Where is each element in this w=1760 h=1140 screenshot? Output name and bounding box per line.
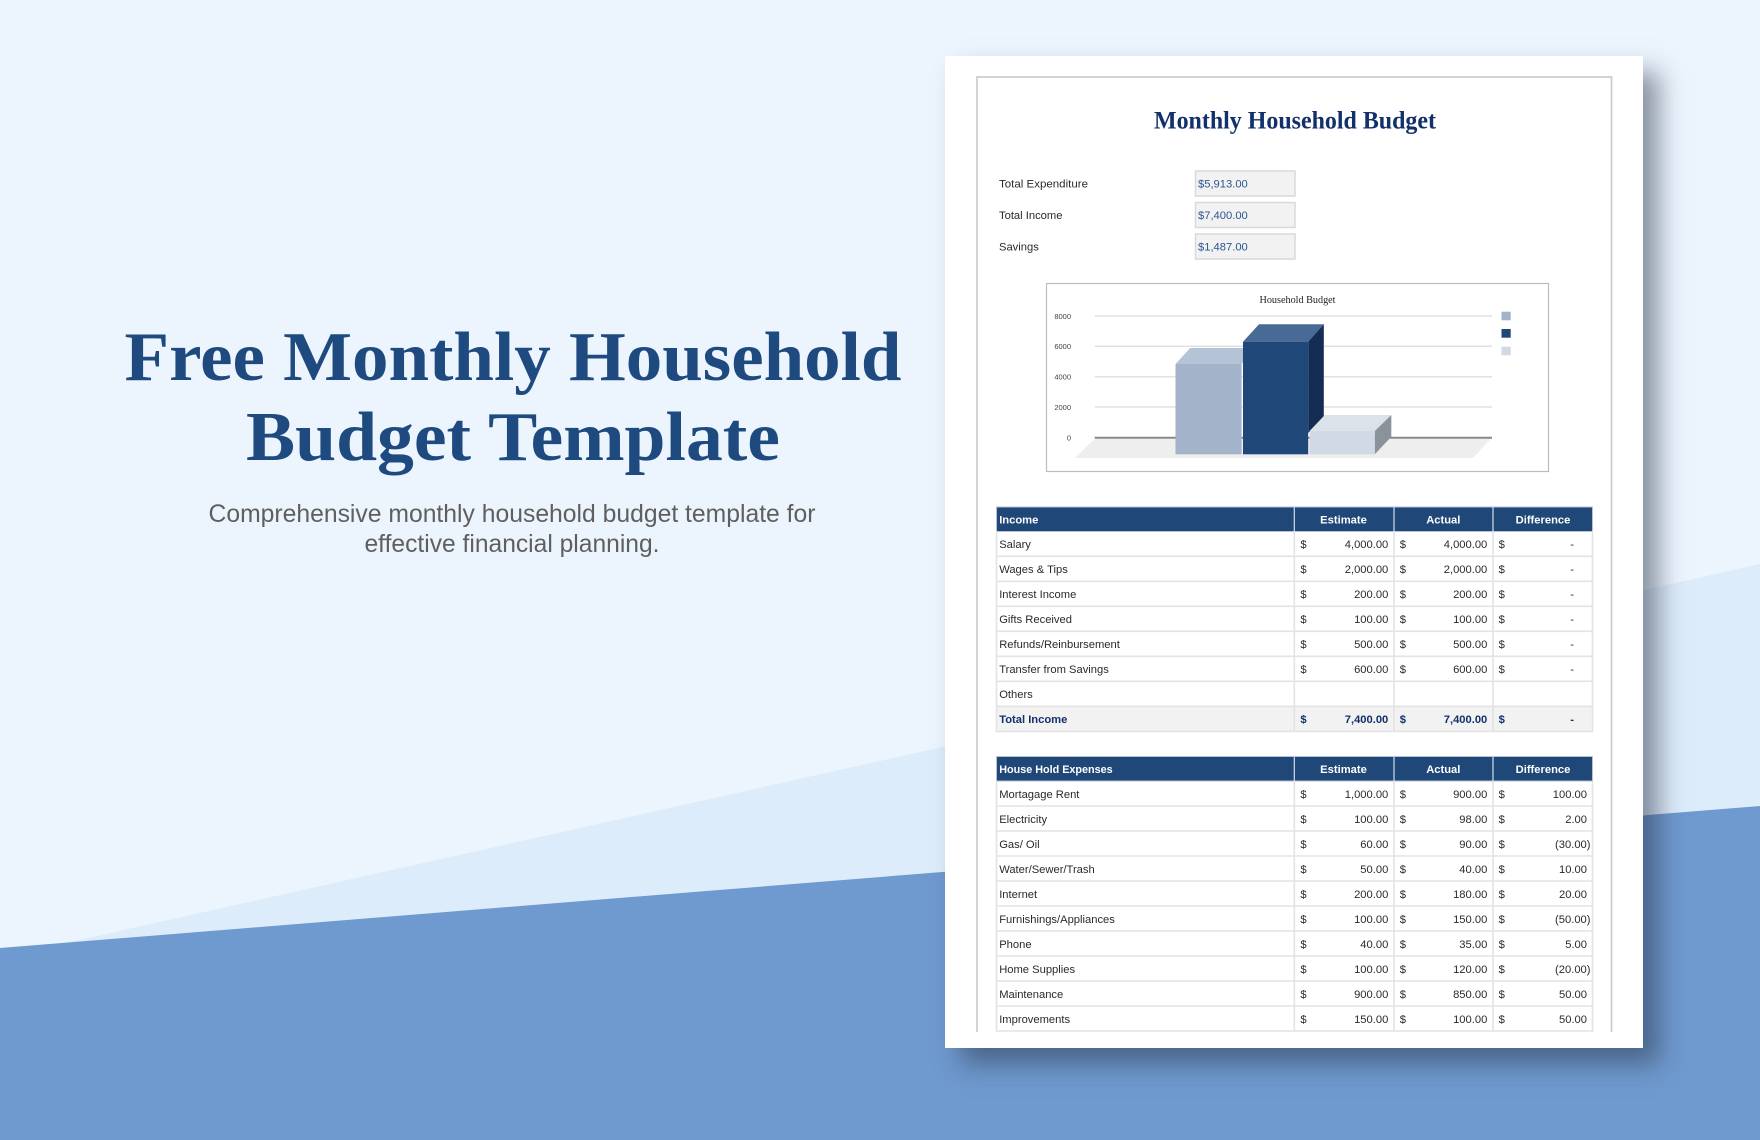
row: maintenance: $ [1499, 989, 1506, 1001]
row: maintenance [999, 989, 1587, 1001]
row: refunds [999, 639, 1574, 651]
row: wages and tips: - [1570, 564, 1574, 576]
row: transfer from savings: $ [1300, 664, 1307, 676]
row: improvements: Improvements [999, 1014, 1070, 1026]
row: mortgage rent: $ [1300, 789, 1307, 801]
row: furnishings: Furnishings/Appliances [999, 914, 1115, 926]
row: gifts received [999, 614, 1574, 626]
row: gifts received: $ [1400, 614, 1407, 626]
row: transfer from savings: 600.00 [1453, 664, 1487, 676]
row: electricity [999, 814, 1587, 826]
row: interest income: Interest Income [999, 589, 1076, 601]
summary: savings: Savings [999, 242, 1039, 254]
row: transfer from savings: $ [1499, 664, 1506, 676]
row: home supplies: $ [1499, 964, 1506, 976]
row: interest income: $ [1400, 589, 1407, 601]
row: furnishings: $ [1499, 914, 1506, 926]
expenses table header: Difference [1516, 764, 1570, 776]
row: others: Others [999, 689, 1033, 701]
row: improvements: 50.00 [1559, 1014, 1587, 1026]
row: mortgage rent: 1,000.00 [1345, 789, 1388, 801]
title: Budget Template [246, 399, 780, 476]
row: phone: $ [1300, 939, 1307, 951]
row: refunds: 500.00 [1354, 639, 1388, 651]
row: wages and tips [999, 564, 1574, 576]
row: internet: $ [1300, 889, 1307, 901]
row: improvements: $ [1499, 1014, 1506, 1026]
row: phone [999, 939, 1587, 951]
row: electricity: 98.00 [1459, 814, 1487, 826]
row: electricity: $ [1300, 814, 1307, 826]
summary: savings [999, 234, 1295, 259]
summary: savings: $1,487.00 [1198, 242, 1248, 254]
row: gifts received: Gifts Received [999, 614, 1072, 626]
row: wages and tips: 2,000.00 [1444, 564, 1487, 576]
summary: total income [999, 202, 1295, 228]
row: refunds: $ [1400, 639, 1407, 651]
row: salary: $ [1300, 539, 1307, 551]
3D bar chart: Household Budget [1046, 284, 1548, 472]
row: mortgage rent: 100.00 [1553, 789, 1587, 801]
row: water sewer trash: 10.00 [1559, 864, 1587, 876]
summary: total income: $7,400.00 [1198, 210, 1248, 222]
bar: savings [1310, 415, 1391, 454]
subtitle [208, 500, 816, 558]
row: total income: $ [1499, 714, 1506, 726]
row: salary: Salary [999, 539, 1031, 551]
row: water sewer trash [999, 864, 1587, 876]
expenses table header [996, 756, 1592, 781]
row: gas and oil: $ [1499, 839, 1506, 851]
row: improvements [999, 1014, 1587, 1026]
row: wages and tips: 2,000.00 [1345, 564, 1388, 576]
income table total background [996, 706, 1592, 731]
row: salary: 4,000.00 [1345, 539, 1388, 551]
row: total income: $ [1300, 714, 1307, 726]
row: salary: - [1570, 539, 1574, 551]
row: total income: 7,400.00 [1444, 714, 1487, 726]
income table header: Difference [1516, 514, 1570, 526]
row: gifts received: 100.00 [1453, 614, 1487, 626]
row: home supplies: $ [1300, 964, 1307, 976]
row: total income: - [1570, 714, 1574, 726]
row: interest income [999, 589, 1574, 601]
row: salary [999, 539, 1574, 551]
income table [996, 507, 1592, 732]
row: total income [999, 714, 1574, 726]
row: salary: 4,000.00 [1444, 539, 1487, 551]
summary: total expenditure: Total Expenditure [999, 178, 1088, 190]
income table header: Actual [1426, 514, 1460, 526]
row: mortgage rent: Mortagage Rent [999, 789, 1080, 801]
row: water sewer trash: Water/Sewer/Trash [999, 864, 1095, 876]
row: home supplies: Home Supplies [999, 964, 1075, 976]
chart title: Household Budget [1260, 295, 1336, 306]
row: gifts received: - [1570, 614, 1574, 626]
row: gas and oil: 90.00 [1459, 839, 1487, 851]
subtitle: effective financial planning. [364, 530, 660, 558]
row: gas and oil [999, 839, 1591, 851]
row: internet: 20.00 [1559, 889, 1587, 901]
row: gas and oil: (30.00) [1555, 839, 1591, 851]
row: transfer from savings: - [1570, 664, 1574, 676]
income table header: Estimate [1320, 514, 1367, 526]
row: transfer from savings: 600.00 [1354, 664, 1388, 676]
row: refunds: 500.00 [1453, 639, 1487, 651]
row: wages and tips: $ [1499, 564, 1506, 576]
sheet heading: Monthly Household Budget [1154, 108, 1437, 134]
y axis labels: 4000 [1054, 372, 1071, 382]
row: transfer from savings [999, 664, 1574, 676]
row: maintenance: $ [1300, 989, 1307, 1001]
row: maintenance: Maintenance [999, 989, 1063, 1001]
row: transfer from savings: Transfer from Savings [999, 664, 1109, 676]
income table header: Income [999, 514, 1038, 526]
row: phone: 35.00 [1459, 939, 1487, 951]
row: transfer from savings: $ [1400, 664, 1407, 676]
row: home supplies [999, 964, 1591, 976]
row: wages and tips: Wages & Tips [999, 564, 1068, 576]
row: refunds: $ [1300, 639, 1307, 651]
y axis labels: 8000 [1054, 312, 1071, 321]
row: total income: Total Income [999, 714, 1067, 726]
row: electricity: $ [1499, 814, 1506, 826]
row: internet: Internet [999, 889, 1038, 901]
row: mortgage rent [999, 789, 1587, 801]
row: water sewer trash: $ [1400, 864, 1407, 876]
y axis labels: 2000 [1054, 403, 1071, 412]
row: salary: $ [1400, 539, 1407, 551]
row: interest income: 200.00 [1453, 589, 1487, 601]
row: mortgage rent: $ [1499, 789, 1506, 801]
row: maintenance: 900.00 [1354, 989, 1388, 1001]
expenses table header: House Hold Expenses [999, 764, 1113, 776]
y axis labels [1054, 312, 1071, 442]
row: phone: Phone [999, 939, 1032, 951]
subtitle: Comprehensive monthly household budget template for [208, 500, 816, 528]
row: wages and tips: $ [1400, 564, 1407, 576]
bar: income [1243, 324, 1324, 454]
row: interest income: $ [1499, 589, 1506, 601]
row: gas and oil: $ [1300, 839, 1307, 851]
row: refunds: $ [1499, 639, 1506, 651]
household expenses table [996, 756, 1592, 1031]
row: improvements: $ [1400, 1014, 1407, 1026]
row: internet: $ [1400, 889, 1407, 901]
row: maintenance: $ [1400, 989, 1407, 1001]
row: internet: 200.00 [1354, 889, 1388, 901]
row: gifts received: $ [1499, 614, 1506, 626]
row: total income: 7,400.00 [1345, 714, 1388, 726]
summary block [999, 171, 1295, 259]
row: phone: 40.00 [1360, 939, 1388, 951]
row: home supplies: 120.00 [1453, 964, 1487, 976]
row: improvements: $ [1300, 1014, 1307, 1026]
row: mortgage rent: $ [1400, 789, 1407, 801]
expenses table header: Estimate [1320, 764, 1367, 776]
row: furnishings: 150.00 [1453, 914, 1487, 926]
row: gifts received: $ [1300, 614, 1307, 626]
row: water sewer trash: $ [1499, 864, 1506, 876]
row: home supplies: $ [1400, 964, 1407, 976]
row: gifts received: 100.00 [1354, 614, 1388, 626]
bar: expenditure [1176, 348, 1256, 454]
row: internet [999, 889, 1587, 901]
row: internet: 180.00 [1453, 889, 1487, 901]
row: improvements: 150.00 [1354, 1014, 1388, 1026]
row: electricity: 100.00 [1354, 814, 1388, 826]
row: water sewer trash: 40.00 [1459, 864, 1487, 876]
row: refunds: Refunds/Reinbursement [999, 639, 1121, 651]
row: electricity: $ [1400, 814, 1407, 826]
summary: total expenditure: $5,913.00 [1198, 178, 1248, 190]
row: electricity: Electricity [999, 814, 1047, 826]
panel: budget paper sheet [945, 56, 1643, 1048]
income table header [996, 507, 1592, 532]
legend swatches [1502, 312, 1511, 355]
row: water sewer trash: 50.00 [1360, 864, 1388, 876]
row: salary: $ [1499, 539, 1506, 551]
row: home supplies: (20.00) [1555, 964, 1591, 976]
row: furnishings: $ [1300, 914, 1307, 926]
sheet border [977, 77, 1612, 1032]
row: furnishings [999, 914, 1591, 926]
y axis labels: 0 [1067, 434, 1071, 442]
row: gas and oil: $ [1400, 839, 1407, 851]
summary: total income: Total Income [999, 210, 1062, 222]
row: furnishings: 100.00 [1354, 914, 1388, 926]
row: wages and tips: $ [1300, 564, 1307, 576]
row: furnishings: $ [1400, 914, 1407, 926]
row: furnishings: (50.00) [1555, 914, 1591, 926]
row: improvements: 100.00 [1453, 1014, 1487, 1026]
row: home supplies: 100.00 [1354, 964, 1388, 976]
row: internet: $ [1499, 889, 1506, 901]
row: interest income: 200.00 [1354, 589, 1388, 601]
row: maintenance: 850.00 [1453, 989, 1487, 1001]
title [124, 319, 902, 476]
row: gas and oil: 60.00 [1360, 839, 1388, 851]
row: interest income: $ [1300, 589, 1307, 601]
row: phone: $ [1499, 939, 1506, 951]
row: refunds: - [1570, 639, 1574, 651]
row: total income: $ [1400, 714, 1407, 726]
row: maintenance: 50.00 [1559, 989, 1587, 1001]
row: electricity: 2.00 [1565, 814, 1587, 826]
row: water sewer trash: $ [1300, 864, 1307, 876]
row: gas and oil: Gas/ Oil [999, 839, 1040, 851]
summary: total expenditure [999, 171, 1295, 196]
row: interest income: - [1570, 589, 1574, 601]
row: mortgage rent: 900.00 [1453, 789, 1487, 801]
row: phone: $ [1400, 939, 1407, 951]
row: phone: 5.00 [1565, 939, 1587, 951]
expenses table header: Actual [1426, 764, 1460, 776]
y axis labels: 6000 [1054, 342, 1071, 351]
title: Free Monthly Household [124, 319, 902, 396]
